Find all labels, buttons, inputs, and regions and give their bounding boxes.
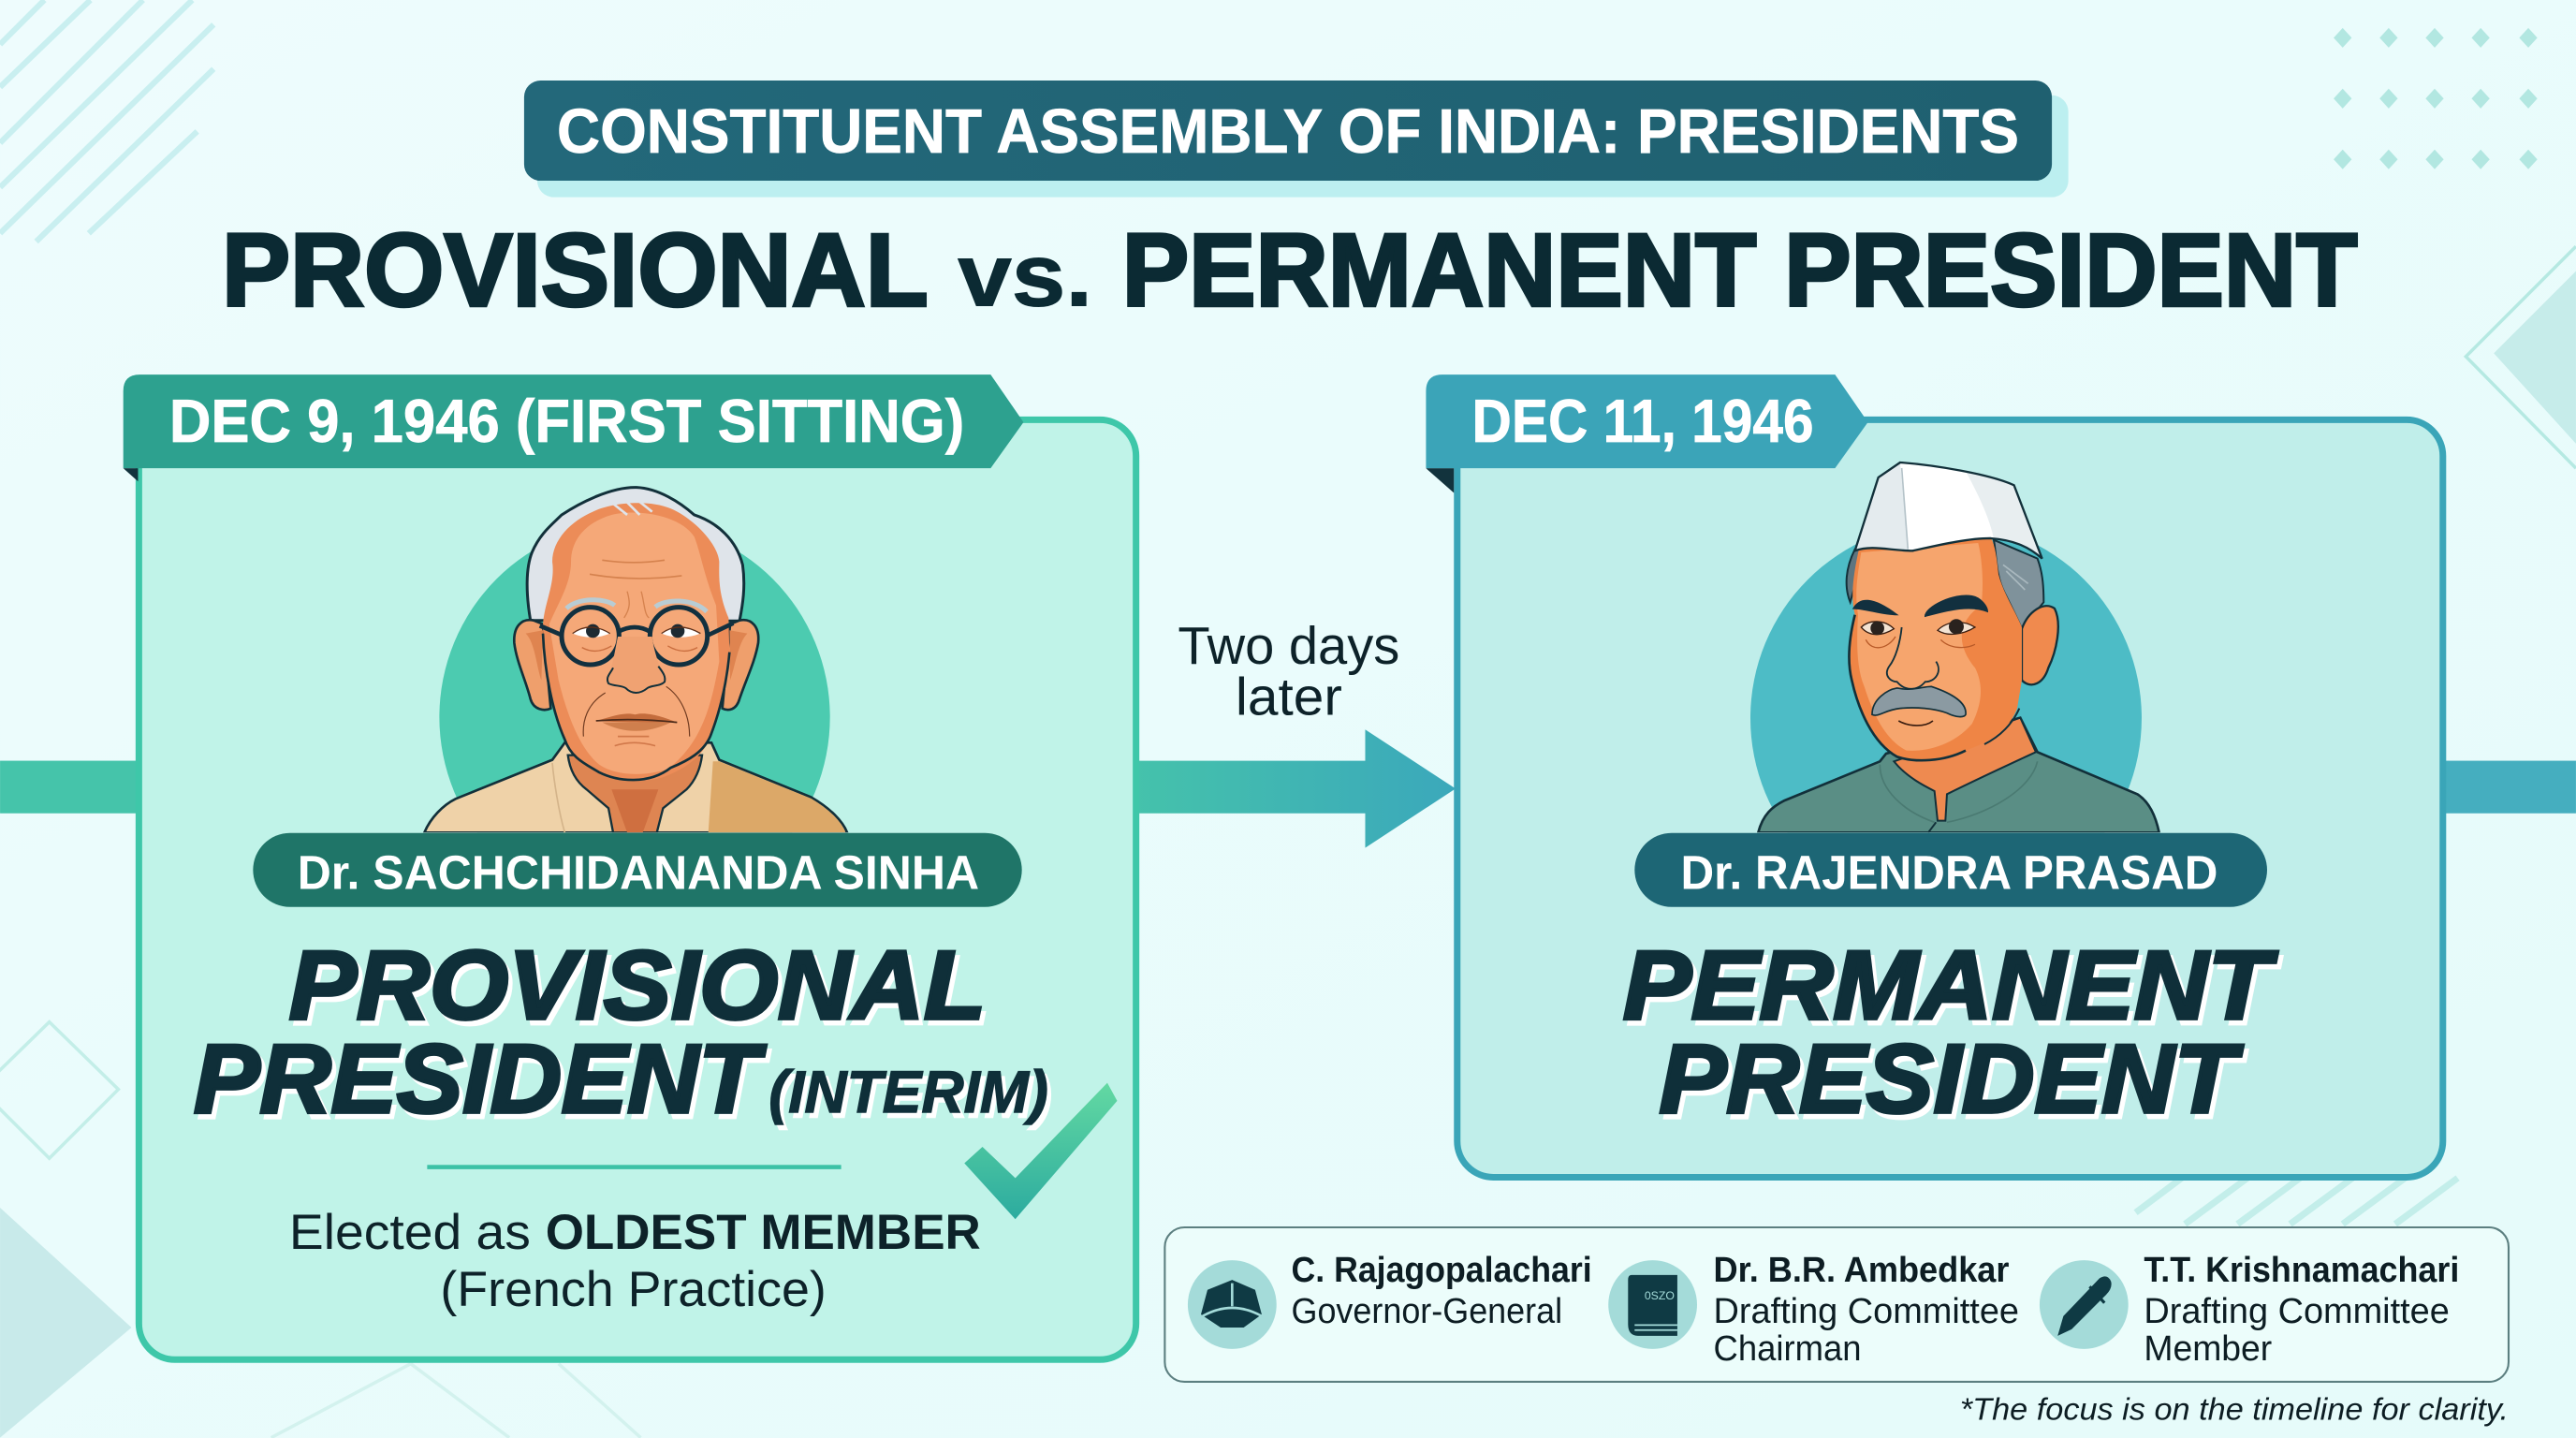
figure: T.T. Krishnamachari: Member (2144, 1328, 2272, 1368)
role heading: PROVISIONAL (289, 931, 986, 1039)
main title: vs. (958, 226, 1092, 325)
header banner: CONSTITUENT ASSEMBLY OF INDIA: PRESIDENTS (557, 97, 2019, 167)
label: two days later (1178, 616, 1399, 726)
main title (222, 213, 2358, 328)
background decoration: top-left stripes (0, 0, 213, 242)
role heading: (INTERIM) (773, 1064, 1052, 1130)
icon: book (1608, 1260, 1697, 1349)
box background (1164, 1227, 2509, 1382)
name badge (253, 833, 1022, 907)
icon: book: 0SZO (1645, 1289, 1675, 1302)
background decoration: right chevron (2466, 246, 2576, 468)
date ribbon: DEC 11, 1946 (1472, 387, 1814, 455)
main title: PROVISIONAL (222, 213, 929, 328)
figure: C. Rajagopalachari: Governor-General (1292, 1291, 1562, 1330)
portrait: Dr. Rajendra Prasad (1750, 461, 2160, 833)
figure: Dr. B.R. Ambedkar: Chairman (1714, 1328, 1862, 1368)
footnote: *The focus is on the timeline for clarity. (1960, 1392, 2509, 1427)
figure: C. Rajagopalachari: C. Rajagopalachari (1292, 1250, 1592, 1289)
background decoration: bottom-left shapes (0, 1022, 641, 1438)
panel: other key figures (1164, 1227, 2509, 1382)
icon: cap (1188, 1260, 1277, 1349)
name badge: Dr. SACHCHIDANANDA SINHA (298, 845, 979, 899)
role heading: PRESIDENT (1660, 1024, 2244, 1133)
role heading: PRESIDENT (198, 1029, 770, 1137)
figure: T.T. Krishnamachari: T.T. Krishnamachari (2144, 1250, 2459, 1289)
figure: Dr. B.R. Ambedkar: Drafting Committee (1714, 1291, 2019, 1330)
background decoration: top-right diamonds (2334, 28, 2538, 169)
icon: pen (2040, 1260, 2129, 1349)
label: two days later: Two days (1178, 616, 1399, 675)
timeline arrow (0, 729, 2576, 848)
background decoration: stripes beneath right panel (2136, 1178, 2458, 1224)
election note: (French Practice) (440, 1262, 827, 1317)
role heading: PERMANENT (1623, 931, 2278, 1039)
role heading (194, 931, 1052, 1137)
election note: Elected as (289, 1205, 531, 1260)
portrait: Dr. Sachchidananda Sinha (423, 486, 848, 833)
role heading: PERMANENT (1627, 935, 2282, 1044)
figure: T.T. Krishnamachari: Drafting Committee (2144, 1291, 2450, 1330)
role heading: PROVISIONAL (293, 935, 989, 1044)
date ribbon (1426, 374, 1868, 493)
panel background (139, 419, 1136, 1359)
name badge (1634, 833, 2267, 907)
election note (289, 1205, 981, 1317)
panel: provisional president (124, 374, 1136, 1359)
role heading (1623, 931, 2282, 1137)
label: two days later: later (1236, 667, 1342, 726)
figure: C. Rajagopalachari (1292, 1250, 1592, 1330)
role heading: (INTERIM) (768, 1060, 1048, 1125)
name badge: Dr. RAJENDRA PRASAD (1680, 845, 2217, 899)
figure: T.T. Krishnamachari (2144, 1250, 2459, 1368)
panel: permanent president (1426, 374, 2443, 1177)
main title: PERMANENT PRESIDENT (1122, 213, 2358, 328)
election note: OLDEST MEMBER (546, 1205, 981, 1260)
date ribbon (124, 374, 1023, 481)
figure: Dr. B.R. Ambedkar: Dr. B.R. Ambedkar (1714, 1250, 2010, 1289)
figure: Dr. B.R. Ambedkar (1714, 1250, 2019, 1368)
role heading: PRESIDENT (194, 1024, 767, 1133)
header banner (524, 81, 2069, 198)
date ribbon: DEC 9, 1946 (FIRST SITTING) (169, 387, 964, 455)
panel background (1457, 419, 2443, 1177)
role heading: PRESIDENT (1663, 1029, 2247, 1137)
check mark icon (964, 1083, 1117, 1219)
